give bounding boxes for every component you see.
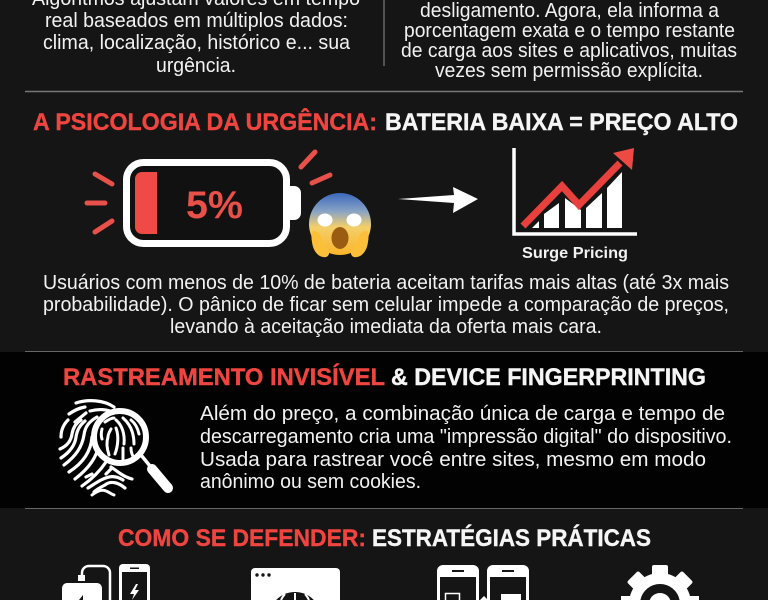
text block: device fingerprinting: descarregamento cria uma "impressão digital" do dispositivo. <box>200 426 732 448</box>
text block: urgency explanation: probabilidade). O pânico de ficar sem celular impede a comparação de preços, <box>43 294 729 316</box>
label: surge pricing: Surge Pricing <box>522 245 628 262</box>
heading: invisible tracking <box>63 363 706 391</box>
heading: how to defend: ESTRATÉGIAS PRÁTICAS <box>372 524 651 552</box>
text block: device fingerprinting <box>200 403 732 493</box>
arrow: battery to surge pricing <box>398 187 478 213</box>
text block: dynamic algorithms: real baseados em múltiplos dados: <box>45 10 348 32</box>
heading: psychology of urgency: A PSICOLOGIA DA URGÊNCIA: <box>33 108 377 136</box>
heading: how to defend <box>118 524 651 552</box>
icon: low battery: 5% <box>186 184 243 227</box>
text block: battery API: porcentagem exata e o tempo restante <box>404 20 735 42</box>
icon: browser window with globe <box>251 568 340 600</box>
text block: urgency explanation <box>43 272 729 338</box>
text block: device fingerprinting: Além do preço, a combinação única de carga e tempo de <box>200 403 725 425</box>
icon: low battery <box>87 152 330 244</box>
text block: dynamic algorithms: urgência. <box>156 55 236 77</box>
text block: urgency explanation: Usuários com menos de 10% de bateria aceitam tarifas mais altas (até 3x mais <box>43 272 729 294</box>
heading: invisible tracking: RASTREAMENTO INVISÍVEL <box>63 363 385 391</box>
heading: invisible tracking: & DEVICE FINGERPRINTING <box>391 364 706 391</box>
text block: battery API <box>401 0 737 82</box>
text block: battery API: de carga aos sites e aplicativos, muitas <box>401 40 737 62</box>
heading: psychology of urgency: BATERIA BAIXA = PREÇO ALTO <box>385 109 738 136</box>
icon: screaming face emoji <box>309 193 371 257</box>
icon: power bank and phone <box>62 564 150 600</box>
chart: surge pricing <box>514 148 637 262</box>
heading: psychology of urgency <box>33 108 738 136</box>
text block: battery API: desligamento. Agora, ela informa a <box>420 0 720 22</box>
text block: battery API: vezes sem permissão explícita. <box>435 60 703 82</box>
icon: two phones comparison <box>437 565 529 600</box>
text block: device fingerprinting: Usada para rastrear você entre sites, mesmo em modo <box>200 449 706 471</box>
icon: fingerprint under magnifier <box>60 401 168 495</box>
text block: dynamic algorithms <box>32 0 360 77</box>
text block: dynamic algorithms: clima, localização, histórico e... sua <box>43 32 351 54</box>
text block: device fingerprinting: anônimo ou sem cookies. <box>200 471 421 493</box>
text block: urgency explanation: levando à aceitação imediata da oferta mais cara. <box>170 316 602 338</box>
heading: how to defend: COMO SE DEFENDER: <box>118 525 366 552</box>
icon: settings gear <box>621 565 699 600</box>
